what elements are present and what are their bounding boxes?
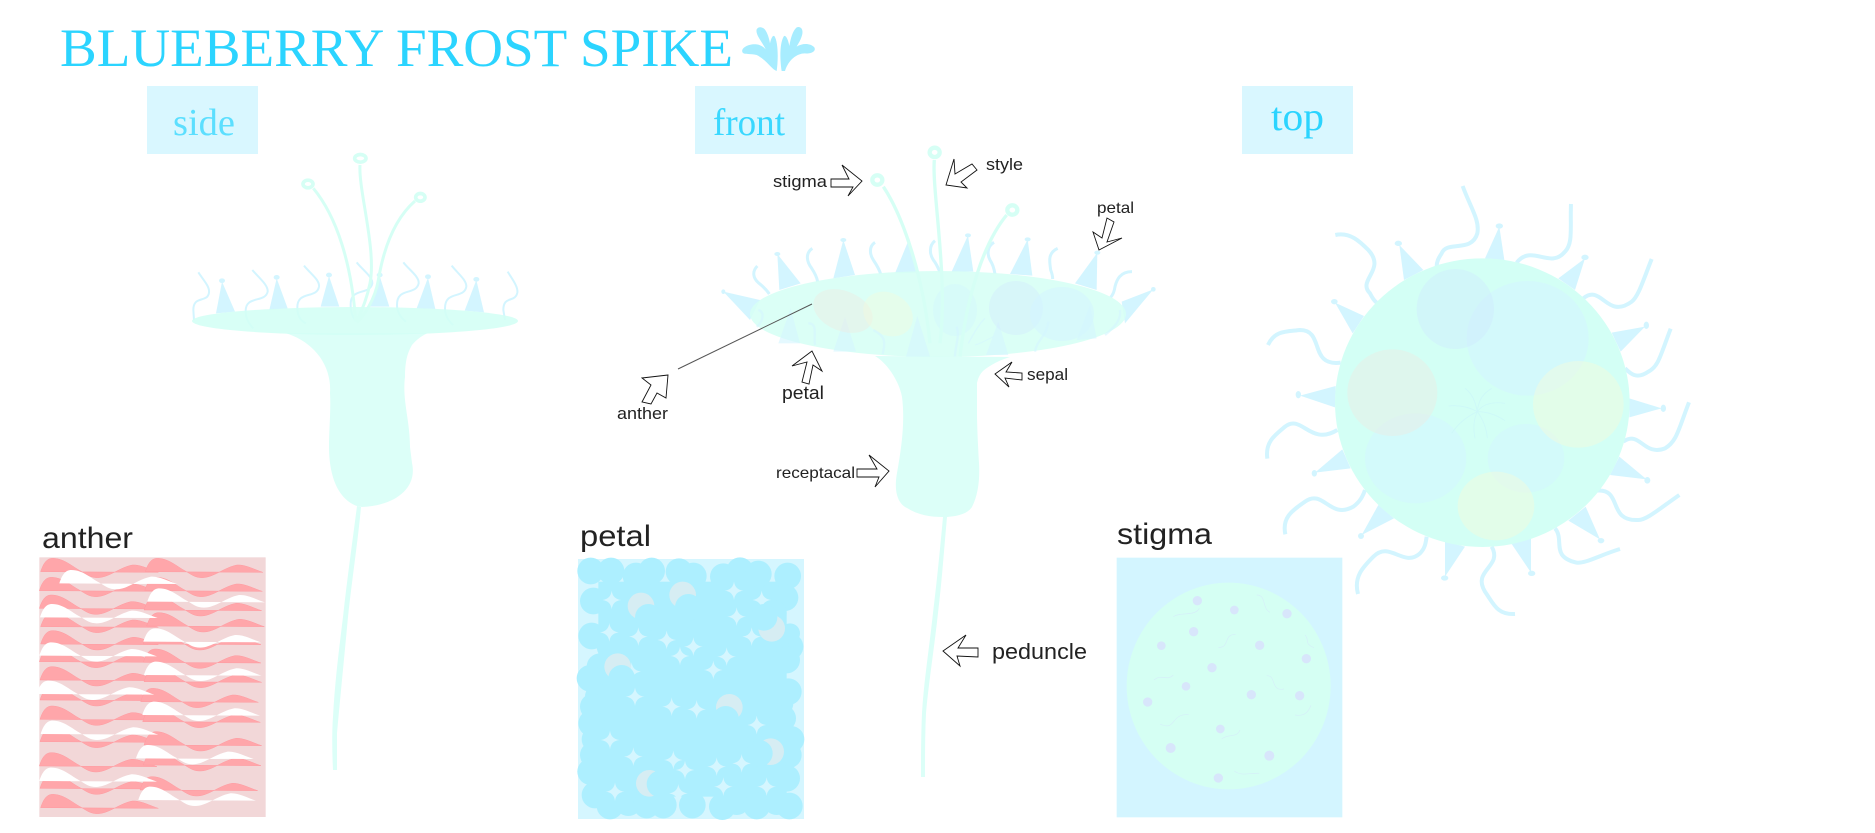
label text: stigma: stigma [773, 172, 828, 191]
grey crescents [604, 582, 785, 797]
panel: side view flower [192, 154, 518, 770]
label: front: front [713, 102, 785, 144]
arrow: lower petal [792, 351, 822, 384]
front peduncle [921, 517, 947, 777]
label: front [695, 86, 806, 154]
label text: anther: anther [617, 404, 668, 423]
label text: upper petal: petal [1097, 200, 1134, 217]
stigma squiggles [1154, 595, 1314, 774]
label: top: top [1271, 94, 1324, 139]
arrow: style [946, 159, 977, 188]
blue cells [577, 557, 804, 820]
label: side [147, 86, 258, 154]
label text: sepal: sepal [1027, 365, 1068, 384]
label: side: side [173, 102, 235, 144]
heading: petal: petal [580, 520, 651, 553]
stigma dots [1143, 596, 1311, 783]
panel: stigma texture [1117, 558, 1342, 817]
front receptacle [875, 356, 1010, 517]
arrow: anther [642, 375, 668, 404]
top disk [1335, 258, 1630, 547]
front styles and stigmas [872, 148, 1017, 357]
side styles and stigmas [303, 154, 425, 323]
label text: style: style [986, 155, 1023, 174]
side peduncle [332, 506, 361, 770]
panel: petal texture [577, 557, 804, 820]
label text: lower petal: petal [782, 383, 824, 403]
panel: anther texture [37, 557, 266, 817]
arrow: peduncle [943, 635, 978, 666]
front disk [750, 271, 1126, 357]
front inner sepals [778, 305, 1097, 357]
front upper sepals [721, 233, 1156, 323]
side receptacle [285, 333, 428, 507]
top sepals [1296, 223, 1666, 581]
label: top [1242, 86, 1353, 154]
side sepals [216, 273, 484, 313]
title: BLUEBERRY FROST SPIKE [60, 18, 733, 78]
top ovules [1347, 269, 1624, 540]
panel: front view flower [721, 148, 1156, 777]
label text: receptacal: receptacal [776, 465, 855, 482]
arrow: upper petal [1093, 218, 1122, 250]
arrow: receptacal [857, 455, 889, 487]
gaps between cells [600, 581, 776, 803]
white waves [37, 570, 265, 806]
front inner petals [757, 310, 1120, 357]
leader line: anther [678, 304, 812, 369]
arrow: sepal [995, 362, 1022, 387]
icon: fountain splash [742, 27, 815, 71]
side petals [193, 262, 517, 328]
label text: peduncle: peduncle [992, 639, 1087, 664]
top center styles [1448, 388, 1505, 438]
pink waves [39, 558, 264, 814]
arrow: stigma [831, 165, 862, 196]
top petals [1267, 186, 1689, 614]
heading: stigma: stigma [1117, 518, 1212, 551]
side disk [192, 307, 518, 335]
front ovules [807, 281, 1094, 345]
panel: top view flower [1267, 186, 1689, 614]
front upper petals [754, 241, 1132, 297]
heading: anther: anther [42, 522, 133, 555]
